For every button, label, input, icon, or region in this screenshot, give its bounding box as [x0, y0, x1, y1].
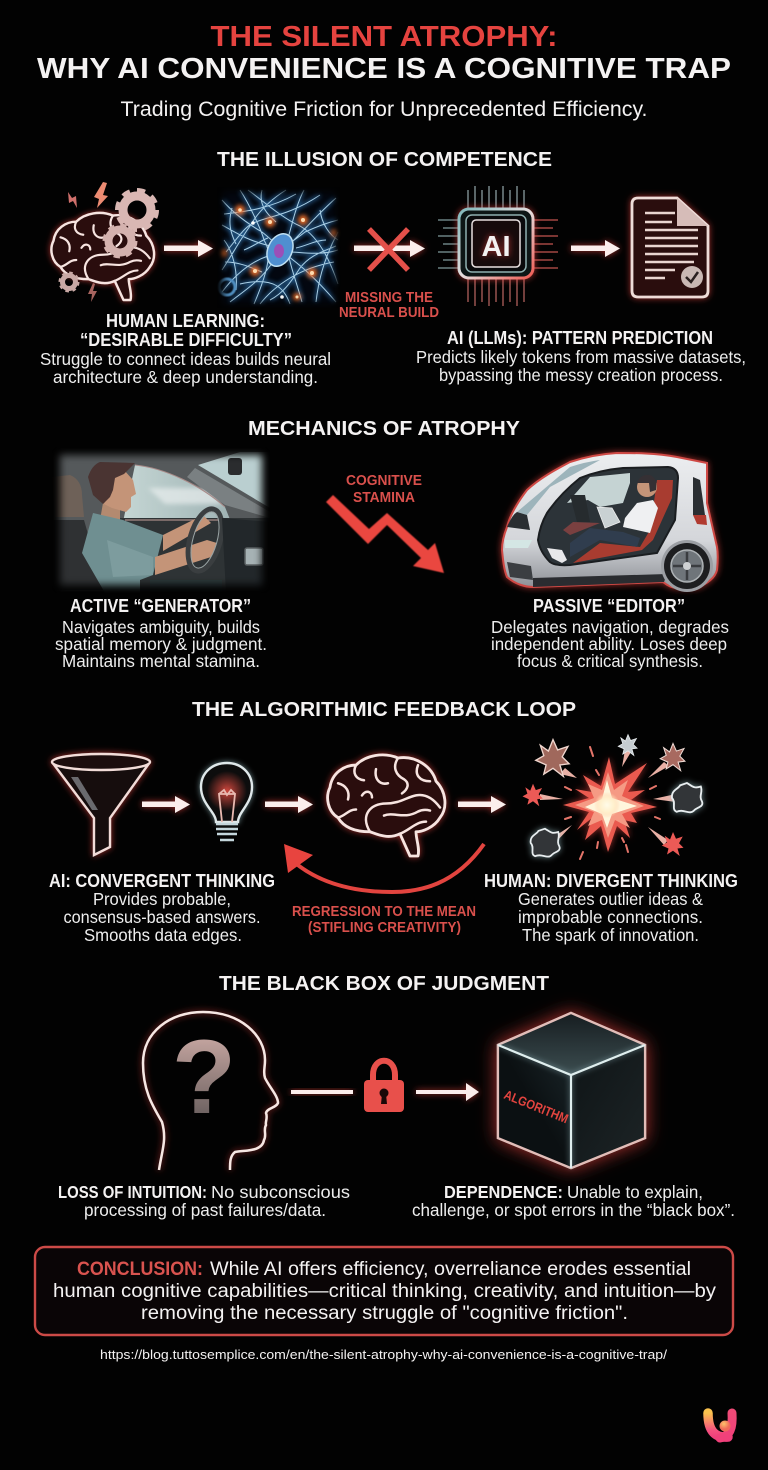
callout: cognitive stamina: STAMINA [353, 490, 415, 506]
title: THE SILENT ATROPHY: [210, 21, 558, 53]
text: loss of intuition: processing of past failures/data. [84, 1200, 326, 1220]
icon: document [632, 198, 708, 297]
text: convergent thinking: consensus-based answers. [64, 907, 260, 927]
icon: red cross [369, 229, 408, 270]
text: convergent thinking: Smooths data edges. [84, 925, 242, 945]
text: passive editor: focus & critical synthesis. [517, 651, 703, 671]
callout: missing the neural build: NEURAL BUILD [339, 305, 439, 321]
image: self-driving car [502, 453, 718, 592]
text: convergent thinking [49, 870, 275, 945]
text: active generator: Navigates ambiguity, builds [62, 617, 260, 637]
icon: brain with gears [51, 182, 156, 302]
text: AI pattern prediction: Predicts likely tokens from massive datasets, [416, 347, 746, 367]
callout: cognitive stamina: COGNITIVE [346, 473, 422, 489]
icon: AI chip [438, 186, 558, 306]
icon: brain [328, 755, 445, 856]
source url: https://blog.tuttosemplice.com/en/the-silent-atrophy-why-ai-convenience-is-a-cognitive-trap/ [100, 1348, 668, 1362]
text: passive editor: Delegates navigation, degrades [491, 617, 729, 637]
text: active generator: Maintains mental stamina. [62, 651, 260, 671]
arrow [416, 1083, 479, 1101]
text: dependence [412, 1182, 735, 1220]
connector line [291, 1090, 353, 1094]
heading: black box of judgment: THE BLACK BOX OF JUDGMENT [219, 973, 549, 995]
callout: cognitive stamina [346, 473, 422, 506]
text: AI pattern prediction: bypassing the messy creation process. [439, 365, 723, 385]
text: passive editor [491, 595, 729, 671]
logo [708, 1413, 732, 1438]
panel: black box of judgment [58, 1012, 735, 1220]
arrow [571, 240, 620, 257]
icon: black box cube [498, 1013, 645, 1168]
text: human learning: Struggle to connect ideas builds neural [40, 349, 331, 369]
heading: algorithmic feedback loop: THE ALGORITHMIC FEEDBACK LOOP [192, 699, 576, 721]
icon: creative explosion [522, 735, 702, 859]
panel: algorithmic feedback loop [49, 735, 738, 945]
text: active generator [55, 595, 267, 671]
panel: illusion of competence [40, 182, 746, 387]
text: divergent thinking: HUMAN: DIVERGENT THINKING [484, 870, 738, 891]
text: dependence: Unable to explain, [567, 1182, 703, 1202]
text: loss of intuition: LOSS OF INTUITION: [58, 1182, 207, 1202]
text: divergent thinking: The spark of innovation. [522, 925, 699, 945]
arrow: regression curve [284, 844, 484, 892]
text: divergent thinking: improbable connections. [518, 907, 703, 927]
image: active driver [52, 447, 270, 593]
panel: conclusion: removing the necessary struggle of "cognitive friction". [141, 1303, 628, 1324]
icon: head with question mark [143, 1012, 278, 1170]
icon: black box cube: ALGORITHM [502, 1087, 571, 1126]
text: AI pattern prediction: AI (LLMs): PATTERN PREDICTION [447, 327, 713, 348]
image: neural network [217, 187, 340, 308]
arrow blocked by cross [354, 229, 425, 270]
text: divergent thinking: Generates outlier ideas & [518, 889, 703, 909]
panel: conclusion: human cognitive capabilities—critical thinking, creativity, and intuition—by [53, 1281, 717, 1302]
callout: missing the neural build: MISSING THE [345, 290, 433, 306]
icon: light bulb [201, 763, 252, 840]
sparks [522, 735, 702, 857]
text: human learning: architecture & deep understanding. [53, 367, 318, 387]
text: convergent thinking: Provides probable, [93, 889, 231, 909]
text: human learning: HUMAN LEARNING: [106, 310, 265, 331]
text: dependence: challenge, or spot errors in the “black box”. [412, 1200, 735, 1220]
panel: conclusion: CONCLUSION: [77, 1259, 203, 1280]
panel: conclusion [35, 1247, 733, 1335]
arrow [265, 796, 313, 813]
icon: AI chip: AI [482, 231, 510, 263]
text: passive editor: PASSIVE “EDITOR” [533, 595, 685, 616]
text: dependence: DEPENDENCE: [444, 1182, 563, 1202]
callout: regression to the mean: (STIFLING CREATIVITY) [308, 920, 461, 936]
icon: padlock [364, 1061, 404, 1112]
title [37, 21, 731, 85]
text: AI pattern prediction [416, 327, 746, 385]
text: active generator: spatial memory & judgment. [55, 634, 267, 654]
text: passive editor: independent ability. Loses deep [491, 634, 727, 654]
text: convergent thinking: AI: CONVERGENT THINKING [49, 870, 275, 891]
text: divergent thinking [484, 870, 738, 945]
panel: mechanics of atrophy [52, 447, 729, 671]
callout: missing the neural build [339, 290, 439, 321]
subtitle: Trading Cognitive Friction for Unprecedented Efficiency. [120, 98, 648, 121]
arrow [164, 240, 213, 257]
arrow [142, 796, 190, 813]
panel: conclusion: While AI offers efficiency, overreliance erodes essential [210, 1259, 691, 1280]
title: WHY AI CONVENIENCE IS A COGNITIVE TRAP [37, 53, 731, 85]
arrow: falling cognitive stamina [326, 495, 444, 573]
text: active generator: ACTIVE “GENERATOR” [70, 595, 251, 616]
icon: head with question mark: ? [172, 1019, 236, 1136]
icon: funnel [52, 754, 150, 855]
callout: regression to the mean [292, 904, 476, 936]
callout: regression to the mean: REGRESSION TO THE MEAN [292, 904, 476, 920]
text: human learning: “DESIRABLE DIFFICULTY” [80, 329, 292, 350]
text: loss of intuition [58, 1182, 350, 1220]
heading: mechanics of atrophy: MECHANICS OF ATROPHY [248, 418, 521, 440]
text: loss of intuition: No subconscious [211, 1182, 350, 1202]
heading: the illusion of competence: THE ILLUSION OF COMPETENCE [217, 149, 552, 171]
text: human learning [40, 310, 331, 387]
arrow [458, 796, 506, 813]
